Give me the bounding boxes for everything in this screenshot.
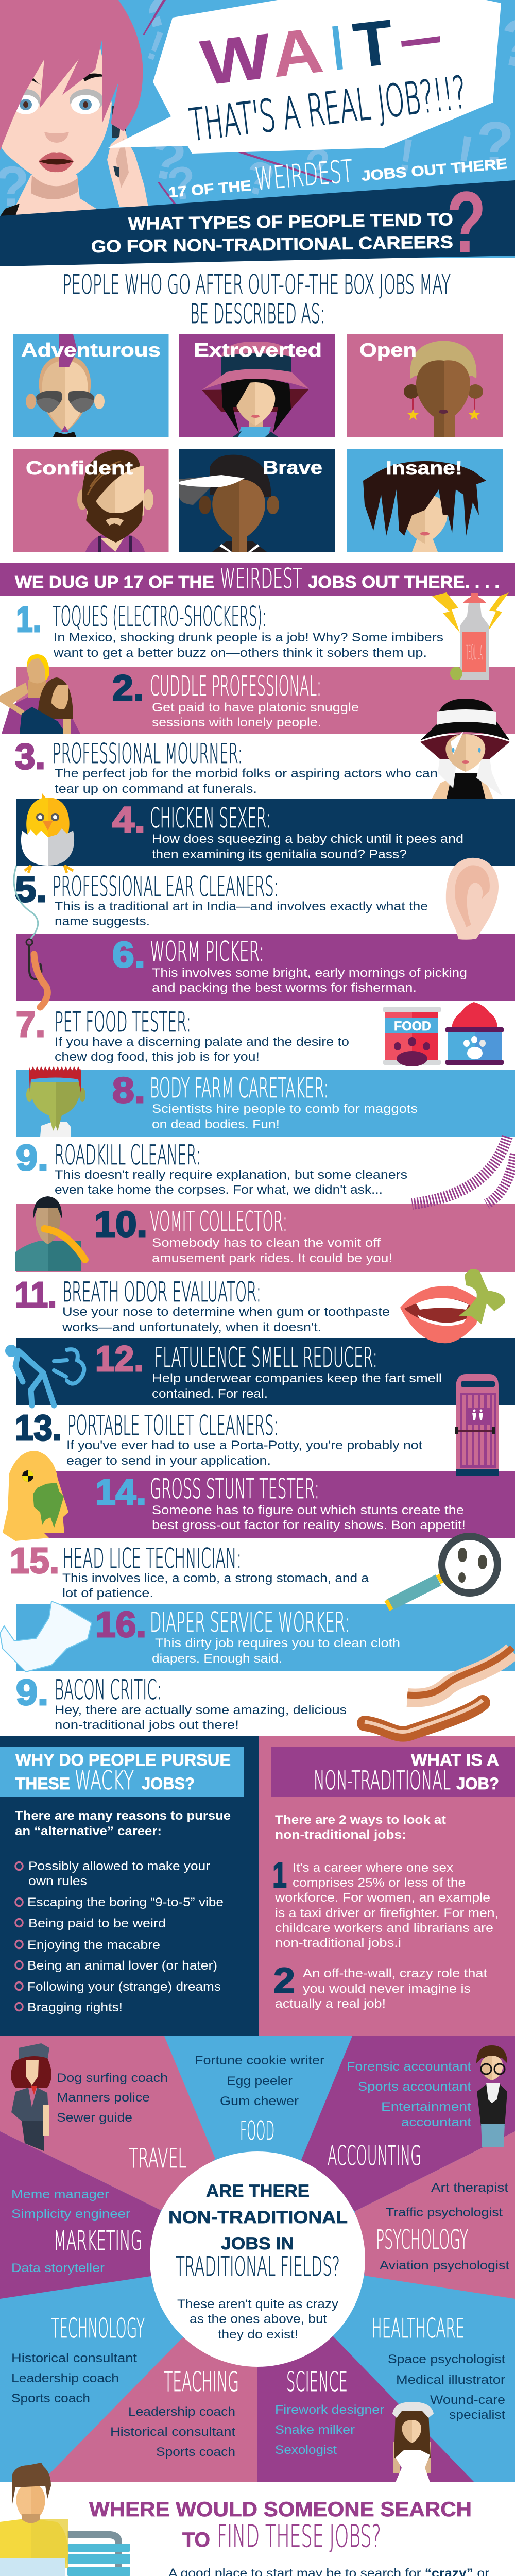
job 16: diaper service worker: DIAPER SERVICE WORKER: xyxy=(150,1607,350,1638)
segment: teaching: Sports coach xyxy=(156,2445,235,2459)
job 10: vomit collector xyxy=(94,1204,392,1265)
job 11: breath odor evaluator: works—and unfortunately, when it doesn't. xyxy=(62,1320,321,1334)
segment: marketing xyxy=(11,2188,142,2275)
panel: why do people pursue xyxy=(0,1736,259,2036)
banner: what types of people: WHAT TYPES OF PEOPLE TEND TO xyxy=(128,210,453,234)
icon: man vomiting xyxy=(15,1196,85,1271)
panel: extroverted: Extroverted xyxy=(194,340,322,361)
panel: extroverted xyxy=(179,334,335,437)
segment: healthcare: Wound-care xyxy=(430,2393,505,2407)
bullet list of reasons: Being an animal lover (or hater) xyxy=(27,1959,217,1973)
job 4: chicken sexer: CHICKEN SEXER: xyxy=(150,803,271,834)
segment: technology: TECHNOLOGY xyxy=(51,2313,145,2344)
segment: healthcare: Medical illustrator xyxy=(396,2373,505,2387)
job 9: roadkill cleaner: This doesn't really require explanation, but some cleaners xyxy=(55,1168,407,1182)
segment: science: Firework designer xyxy=(275,2403,384,2417)
job 8: body farm caretaker: on dead bodies. Fun! xyxy=(152,1117,280,1131)
heading: why do people pursue these wacky jobs: JOBS? xyxy=(142,1774,195,1793)
panel: confident xyxy=(13,449,169,552)
center circle text xyxy=(168,2181,348,2342)
segment: travel: Dog surfing coach xyxy=(57,2071,168,2085)
intro text: an “alternative” career: xyxy=(15,1824,162,1838)
segment: teaching: Historical consultant xyxy=(110,2425,235,2439)
panel: open: Open xyxy=(359,340,417,361)
segment: food: Egg peeler xyxy=(227,2074,293,2088)
center circle text: These aren't quite as crazy xyxy=(177,2297,338,2311)
job 12: flatulence smell reducer: Help underwear companies keep the fart smell xyxy=(152,1371,442,1385)
icon: diaper xyxy=(0,1601,92,1672)
job 4 band xyxy=(16,799,515,866)
icon: tire tracks xyxy=(412,1137,515,1204)
job 7: pet food tester: chew dog food, this job is for you! xyxy=(55,1050,260,1064)
header background: ? xyxy=(164,156,199,211)
job 8: body farm caretaker: BODY FARM CARETAKER: xyxy=(150,1073,329,1104)
job 10 band xyxy=(16,1204,515,1272)
header background: ! xyxy=(395,129,418,182)
segment: technology xyxy=(11,2313,145,2405)
segment: teaching xyxy=(110,2367,239,2459)
panel: open xyxy=(347,334,503,437)
segment: accounting xyxy=(328,2060,471,2172)
job 8: body farm caretaker: 8. xyxy=(112,1070,145,1110)
job 14: gross stunt tester: GROSS STUNT TESTER: xyxy=(150,1473,319,1505)
heading: what is a non-traditional job: JOB? xyxy=(456,1774,499,1793)
heading: where would someone search: TO xyxy=(182,2529,210,2551)
section heading: we dug up 17: WE DUG UP 17 OF THE xyxy=(15,572,214,591)
job 5: ear cleaners: 5. xyxy=(15,869,47,909)
job 6: worm picker: and packing the best worms for fisherman. xyxy=(152,981,417,995)
segment: marketing: Simplicity engineer xyxy=(11,2207,130,2221)
heading: what is a non-traditional job: WHAT IS A xyxy=(411,1751,499,1769)
heading: where would someone search: FIND THESE JOBS? xyxy=(217,2518,381,2554)
job 1: toques: In Mexico, shocking drunk people is a job! Why? Some imbibers xyxy=(54,631,443,645)
job 1: toques: 1. xyxy=(16,599,41,639)
segment: food: Fortune cookie writer xyxy=(195,2054,324,2067)
job 10: vomit collector: amusement park rides. It could be you! xyxy=(152,1251,392,1265)
segment: travel: TRAVEL xyxy=(129,2143,186,2174)
intro text: There are many reasons to pursue xyxy=(15,1809,231,1823)
job 12: flatulence smell reducer xyxy=(95,1338,442,1401)
segment: food xyxy=(195,2054,324,2146)
panel: adventurous: Adventurous xyxy=(21,340,161,361)
intro text xyxy=(15,1809,231,1838)
job 12: flatulence smell reducer: contained. For real. xyxy=(152,1387,268,1401)
bullet list of reasons xyxy=(15,1859,224,2014)
segment: science: SCIENCE xyxy=(286,2367,348,2398)
subtitle: 17 of the weirdest jobs xyxy=(166,140,508,205)
segment: accounting: accountant xyxy=(401,2115,471,2129)
icon: zombie xyxy=(26,1066,85,1137)
job 4: chicken sexer: 4. xyxy=(112,800,145,840)
job 17: bacon critic: BACON CRITIC: xyxy=(55,1674,162,1706)
bullet list of reasons: Being paid to be weird xyxy=(28,1917,166,1930)
bullet list of reasons: Bragging rights! xyxy=(27,2001,123,2014)
bottom section text xyxy=(89,2498,497,2576)
job 16: diaper service worker: diapers. Enough said. xyxy=(152,1652,282,1666)
segment: technology: Sports coach xyxy=(11,2392,90,2405)
header background: ? xyxy=(239,150,280,208)
chart: traditional fields wheel xyxy=(0,2036,515,2482)
job 5: ear cleaners: This is a traditional art in India—and involves exactly what the xyxy=(55,900,428,913)
section heading: we dug up 17: WEIRDEST xyxy=(220,563,302,595)
intro text: non-traditional jobs: xyxy=(275,1828,406,1842)
job 8: body farm caretaker xyxy=(112,1070,418,1131)
job 16: diaper service worker xyxy=(95,1604,400,1666)
job 10: vomit collector: Somebody has to clean the vomit off xyxy=(152,1236,381,1250)
segment: healthcare: specialist xyxy=(449,2408,505,2422)
definition 1 xyxy=(272,1855,499,1950)
segment: technology: Leadership coach xyxy=(11,2371,119,2385)
job 6 band xyxy=(16,934,515,1001)
job 11: breath odor evaluator xyxy=(15,1275,390,1334)
segment: science: Snake milker xyxy=(275,2423,355,2437)
heading: what is a non-traditional job xyxy=(314,1751,499,1795)
heading: where would someone search: WHERE WOULD SOMEONE SEARCH xyxy=(89,2498,472,2521)
icon: tequila bottle and lightning xyxy=(432,592,509,680)
title: I xyxy=(328,12,347,84)
title: W xyxy=(198,21,274,99)
job 2: cuddle professional xyxy=(112,668,359,730)
subtitle: 17 of the weirdest jobs: 17 OF THE xyxy=(168,177,252,200)
job 14: gross stunt tester xyxy=(95,1472,466,1532)
job 3: professional mourner: PROFESSIONAL MOURNER: xyxy=(53,738,243,770)
section heading: we dug up 17: JOBS OUT THERE. . . . xyxy=(308,572,500,591)
heading: why do people pursue these wacky jobs: WACKY xyxy=(75,1766,134,1795)
segment: teaching: TEACHING xyxy=(164,2367,239,2398)
segment: marketing: Data storyteller xyxy=(11,2261,105,2275)
bullet list of reasons: Possibly allowed to make your xyxy=(28,1859,210,1873)
heading: where would someone search xyxy=(89,2498,472,2554)
job 5: ear cleaners xyxy=(15,869,428,928)
job 9: roadkill cleaner xyxy=(16,1138,407,1197)
job 10: vomit collector: VOMIT COLLECTOR: xyxy=(150,1206,287,1238)
job 2: cuddle professional: 2. xyxy=(112,668,144,708)
heading: why do people pursue these wacky jobs: THESE xyxy=(15,1774,70,1793)
job 4: chicken sexer: then examining its genitalia sound? Pass? xyxy=(152,848,407,861)
icon: cuddling couple xyxy=(0,654,80,734)
definition 1: is a taxi driver or firefighter. For men, xyxy=(275,1906,499,1920)
job 3: professional mourner: 3. xyxy=(15,736,45,776)
job 3: professional mourner: tear up on command at funerals. xyxy=(55,782,257,796)
banner: what types of people: ? xyxy=(447,174,486,272)
segment: science: Sexologist xyxy=(275,2443,337,2457)
job 15: head lice technician: lot of patience. xyxy=(62,1586,153,1600)
segment: psychology xyxy=(376,2181,509,2273)
segment: travel: Sewer guide xyxy=(57,2111,132,2125)
icon: mourner in black hat xyxy=(420,699,510,799)
segment: psychology: Art therapist xyxy=(431,2181,508,2195)
intro text xyxy=(275,1813,446,1842)
center circle text: TRADITIONAL FIELDS? xyxy=(176,2251,340,2282)
panel: insane xyxy=(347,449,503,552)
definition 2: actually a real job! xyxy=(275,1997,386,2011)
banner: what types of people: GO FOR NON-TRADITIONAL CAREERS xyxy=(91,232,453,257)
header background xyxy=(0,0,515,258)
center circle text: they do exist! xyxy=(218,2328,298,2342)
center circle text: as the ones above, but xyxy=(190,2312,327,2326)
center circle text: ARE THERE xyxy=(206,2181,310,2201)
segment: food: Gum chewer xyxy=(220,2094,299,2108)
job 14: gross stunt tester: Someone has to figure out which stunts create the xyxy=(152,1503,464,1517)
job 16: diaper service worker: 16. xyxy=(95,1604,146,1645)
job 2: cuddle professional: Get paid to have platonic snuggle xyxy=(152,701,359,715)
icon: fishing hook and worm xyxy=(14,866,47,1007)
job 17: bacon critic: 9. xyxy=(16,1672,48,1713)
icon: accountant with glasses xyxy=(476,2045,507,2147)
job 1: toques: TOQUES (ELECTRO-SHOCKERS): xyxy=(53,601,267,633)
segment: marketing: Meme manager xyxy=(11,2188,109,2201)
segment: accounting: Forensic accountant xyxy=(347,2060,471,2074)
section heading: we dug up 17 xyxy=(0,563,515,596)
panel: brave: Brave xyxy=(263,457,322,478)
icon: ear xyxy=(446,858,499,940)
definition 2: 2 xyxy=(273,1960,295,2001)
heading: people who go after xyxy=(62,269,451,330)
definition 2: you would never imagine is xyxy=(303,1982,471,1996)
subtitle: 17 of the weirdest jobs: JOBS OUT THERE xyxy=(360,156,508,184)
definition 1: comprises 25% or less of the xyxy=(293,1876,466,1890)
segment: food: FOOD xyxy=(240,2116,274,2146)
job 6: worm picker xyxy=(112,935,467,995)
job 7: pet food tester: PET FOOD TESTER: xyxy=(55,1007,191,1038)
icon: man on bench with laptop xyxy=(0,2463,141,2576)
bullet list of reasons: Following your (strange) dreams xyxy=(27,1980,221,1994)
job 13: portable toilet cleaners xyxy=(15,1408,422,1468)
job 14 band xyxy=(16,1471,515,1538)
definition 1: It's a career where one sex xyxy=(293,1861,453,1875)
job 12: flatulence smell reducer: 12. xyxy=(95,1338,144,1379)
panel: adventurous xyxy=(13,334,169,437)
header background: ? xyxy=(144,125,191,194)
title: T xyxy=(350,7,397,81)
icon: crash dummy head with slime xyxy=(3,1451,68,1541)
title xyxy=(187,7,469,151)
job 5: ear cleaners: name suggests. xyxy=(55,914,150,928)
job 3: professional mourner: The perfect job for the morbid folks or aspiring actors who can xyxy=(55,767,438,781)
job 6: worm picker: This involves some bright, early mornings of picking xyxy=(152,966,467,980)
job 8 band xyxy=(16,1070,515,1137)
panel: confident: Confident xyxy=(26,457,133,479)
segment: accounting: ACCOUNTING xyxy=(328,2141,421,2172)
bullet list of reasons: Enjoying the macabre xyxy=(27,1938,160,1952)
icon: nurse xyxy=(392,2402,434,2482)
header background: ? xyxy=(302,140,335,189)
center circle text: JOBS IN xyxy=(221,2234,294,2253)
segment: psychology: Aviation psychologist xyxy=(380,2259,509,2273)
heading: why do people pursue these wacky jobs: WHY DO PEOPLE PURSUE xyxy=(15,1751,231,1769)
bullet list of reasons: Escaping the boring “9-to-5” vibe xyxy=(27,1895,224,1909)
job 15: head lice technician: HEAD LICE TECHNICIAN: xyxy=(62,1543,242,1574)
panel: insane: Insane! xyxy=(386,457,462,479)
bullet list of reasons: own rules xyxy=(28,1874,87,1888)
segment: healthcare xyxy=(371,2313,505,2422)
job 15: head lice technician: 15. xyxy=(10,1540,59,1581)
job 16 band xyxy=(16,1604,515,1671)
job 17: bacon critic xyxy=(16,1672,347,1732)
segment: marketing: MARKETING xyxy=(54,2226,142,2257)
segment: teaching: Leadership coach xyxy=(128,2405,235,2419)
job 13: portable toilet cleaners: PORTABLE TOILET CLEANERS: xyxy=(67,1410,279,1442)
definition 1: 1 xyxy=(272,1855,287,1895)
job 4: chicken sexer: How does squeezing a baby chick until it pees and xyxy=(152,832,464,846)
job 6: worm picker: WORM PICKER: xyxy=(150,936,264,968)
heading: people who go after: BE DESCRIBED AS: xyxy=(190,299,325,330)
job 10: vomit collector: 10. xyxy=(94,1204,147,1244)
job 6: worm picker: 6. xyxy=(112,935,145,975)
job 11: breath odor evaluator: Use your nose to determine when gum or toothpaste xyxy=(62,1305,390,1319)
header background: ? xyxy=(476,109,514,178)
job 1: toques: want to get a better buzz on—others think it sobers them up. xyxy=(53,646,427,660)
segment: psychology: Traffic psychologist xyxy=(386,2206,503,2219)
job 14: gross stunt tester: best gross-out factor for reality shows. Bon appetit! xyxy=(152,1518,466,1532)
job 11: breath odor evaluator: 11. xyxy=(15,1275,57,1315)
header background: ! xyxy=(451,124,478,184)
banner: what types of people xyxy=(0,174,515,272)
definition 1: childcare workers and librarians are xyxy=(275,1921,493,1935)
icon: chick in egg xyxy=(21,793,74,873)
icon: flight attendant xyxy=(11,2043,52,2151)
segment: accounting: Sports accountant xyxy=(358,2080,471,2094)
icon: magnifying glass with lice xyxy=(386,1536,497,1610)
title: A xyxy=(268,15,327,91)
speech bubble xyxy=(108,0,501,154)
intro text: There are 2 ways to look at xyxy=(275,1813,446,1827)
job 17: bacon critic: Hey, there are actually some amazing, delicious xyxy=(55,1703,347,1717)
job 13: portable toilet cleaners: 13. xyxy=(15,1408,62,1448)
job 7: pet food tester: If you have a discerning palate and the desire to xyxy=(55,1035,349,1049)
job 15: head lice technician: This involves lice, a comb, a strong stomach, and a xyxy=(62,1571,369,1585)
definition 2: An off-the-wall, crazy role that xyxy=(303,1967,487,1980)
definition 1: workforce. For women, an example xyxy=(274,1891,490,1905)
job 3: professional mourner xyxy=(15,736,438,796)
job 9: roadkill cleaner: 9. xyxy=(16,1138,48,1178)
job 16: diaper service worker: This dirty job requires you to clean cloth xyxy=(155,1636,400,1650)
segment: healthcare: Space psychologist xyxy=(388,2352,505,2366)
job 11: breath odor evaluator: BREATH ODOR EVALUATOR: xyxy=(62,1277,261,1308)
illustration: shocked woman on phone xyxy=(0,0,148,219)
icon: man passing gas xyxy=(5,1345,84,1405)
header background: ! xyxy=(141,22,170,70)
job 17: bacon critic: non-traditional jobs out there! xyxy=(55,1718,239,1732)
job 8: body farm caretaker: Scientists hire people to comb for maggots xyxy=(152,1102,418,1116)
job 1: toques xyxy=(16,599,443,660)
heading: why do people pursue these wacky jobs xyxy=(15,1751,231,1795)
icon: mouth with bad breath xyxy=(400,1269,505,1343)
job 15: head lice technician xyxy=(10,1540,369,1600)
job 7: pet food tester xyxy=(16,1004,349,1064)
job 4: chicken sexer xyxy=(112,800,464,861)
icon: portable toilet xyxy=(455,1374,499,1476)
segment: technology: Historical consultant xyxy=(11,2351,137,2365)
job 14: gross stunt tester: 14. xyxy=(95,1472,146,1512)
job 13: portable toilet cleaners: If you've ever had to use a Porta-Potty, you're probably not xyxy=(66,1438,422,1452)
icon: bacon strips xyxy=(365,1648,512,1734)
job 2 band xyxy=(16,667,515,734)
segment: science xyxy=(275,2367,384,2457)
segment: travel: Manners police xyxy=(57,2091,150,2105)
job 12 band xyxy=(16,1338,515,1405)
panel: brave xyxy=(179,449,335,552)
job 2: cuddle professional: sessions with lonely people. xyxy=(152,716,321,730)
definition 2 xyxy=(273,1960,487,2011)
job 2: cuddle professional: CUDDLE PROFESSIONAL: xyxy=(150,671,321,702)
icon: pet food can and bowl: FOOD xyxy=(394,1019,431,1033)
icon: pet food can and bowl xyxy=(383,1002,504,1066)
panel: what is a non-traditional job xyxy=(259,1736,515,2036)
job 13: portable toilet cleaners: eager to send in your application. xyxy=(66,1454,271,1468)
segment: travel xyxy=(57,2071,186,2174)
definition 1: non-traditional jobs.i xyxy=(275,1936,401,1950)
segment: accounting: Entertainment xyxy=(381,2100,471,2114)
subtitle: 17 of the weirdest jobs: WEIRDEST xyxy=(254,153,354,197)
job 5: ear cleaners: PROFESSIONAL EAR CLEANERS: xyxy=(53,871,279,903)
job 9: roadkill cleaner: ROADKILL CLEANER: xyxy=(55,1140,201,1171)
job 9: roadkill cleaner: even take home the corpses. For what, we didn't ask... xyxy=(55,1183,383,1197)
center circle text: NON-TRADITIONAL xyxy=(168,2208,348,2227)
job 7: pet food tester: 7. xyxy=(16,1004,45,1044)
